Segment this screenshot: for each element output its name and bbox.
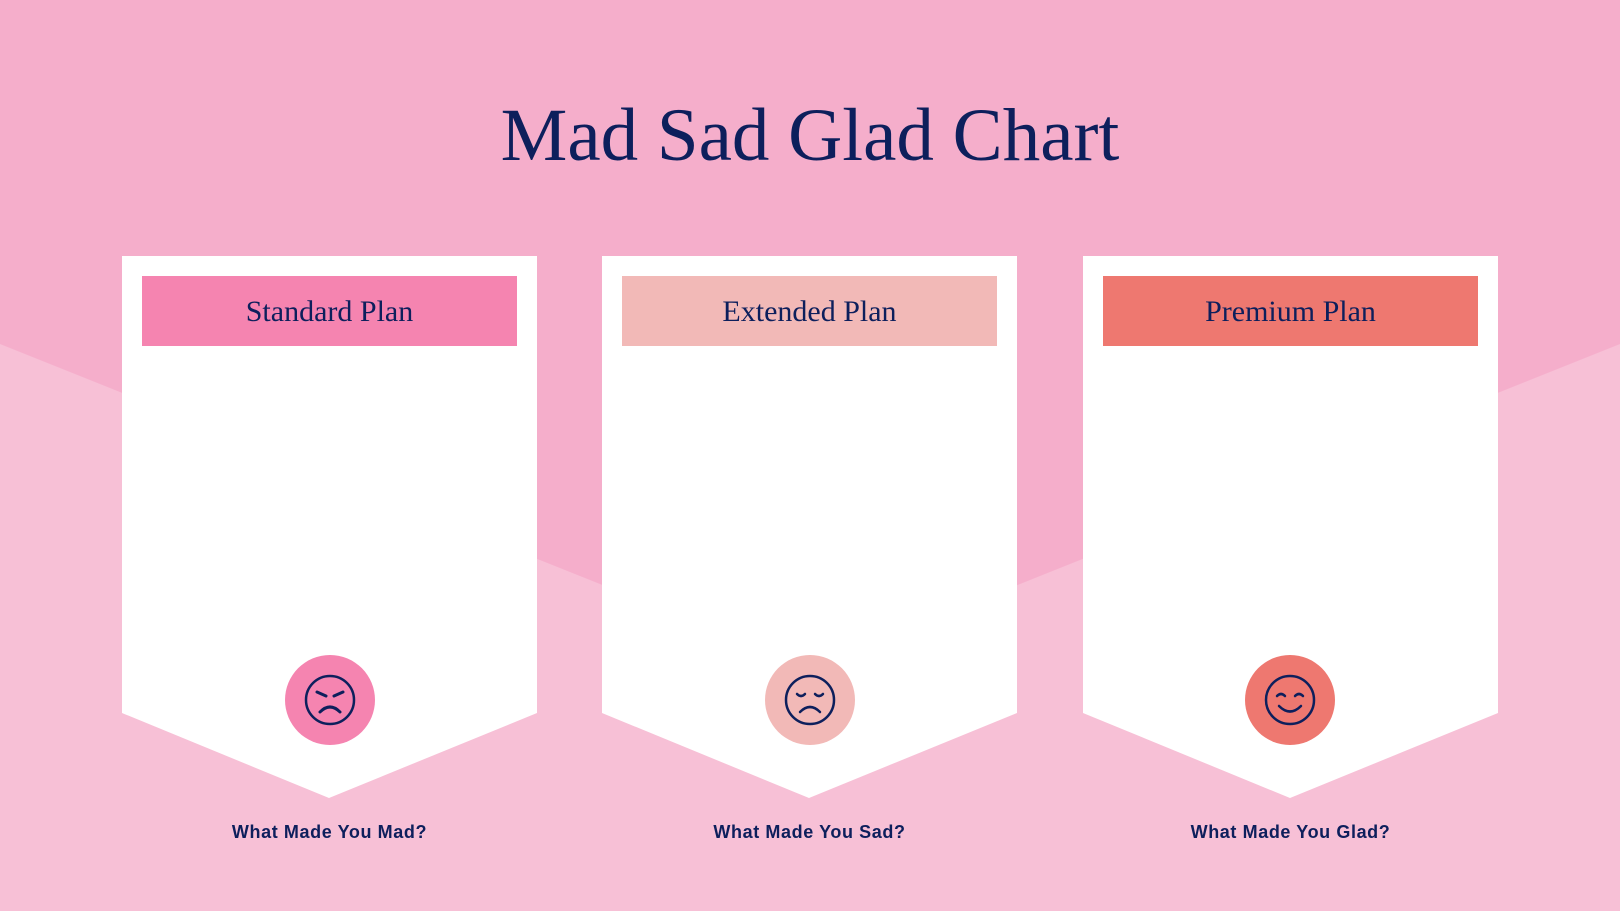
- header: Standard Plan: Standard Plan: [246, 295, 413, 328]
- icon: angry face: [285, 655, 375, 745]
- header: Premium Plan: Premium Plan: [1205, 295, 1376, 328]
- icon: sad face: [765, 655, 855, 745]
- header: Extended Plan: [622, 276, 997, 346]
- label: sad: What Made You Sad?: [713, 822, 906, 842]
- header: Standard Plan: [142, 276, 517, 346]
- header: Premium Plan: [1103, 276, 1478, 346]
- panel: extended plan: [602, 256, 1017, 798]
- icon: glad face: [1245, 655, 1335, 745]
- panel: premium plan: [1083, 256, 1498, 798]
- label: glad: What Made You Glad?: [1191, 822, 1390, 842]
- label: mad: What Made You Mad?: [232, 822, 427, 842]
- title: Mad Sad Glad Chart: [501, 94, 1119, 177]
- panel: standard plan: [122, 256, 537, 798]
- header: Extended Plan: Extended Plan: [722, 295, 897, 328]
